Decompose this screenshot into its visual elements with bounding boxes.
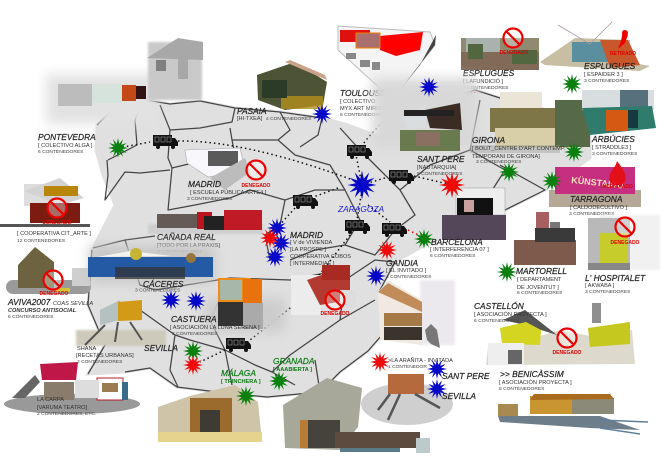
label: Cooperativa: 12 CONTENEDORES [17,238,66,244]
photo: Tarragona: KÜNSTAINO [571,175,624,191]
label: Shana [76,346,134,365]
denied sign: Esplugues: DENEGADO [500,50,529,56]
photo: Pasaia [257,60,327,110]
label: La Arañita: 1 CONTENEDOR [388,364,427,370]
label: Sevilla south: SEVILLA [442,391,476,401]
denied sign: Cooperativa: DENEGADO [43,220,72,226]
photo: Sant Pere haze [372,78,477,148]
label: Benicàssim: [ ASOCIACIÓN PROYECTA ] [499,379,572,386]
denied sign: Aviva2007: DENEGADO [40,291,69,297]
photo: Cañada Real warehouse [148,210,263,234]
label: Shana: SHANA [77,346,97,352]
label: Granada [273,356,315,373]
photo: Castuera [205,278,285,332]
label: La Carpa: LA CARPA [37,397,64,403]
label: Aviva2007 [7,297,93,320]
label: Málaga: MÁLAGA [221,368,256,378]
label: La Arañita: >LA ARAÑITA - INVITADA [388,357,453,364]
label: Pasaia: PASAIA [237,106,267,116]
label: Esplugues Espaider: ESPLUGUES [584,61,636,71]
label: Castellón [474,301,547,324]
green stars [108,74,584,406]
photo: Benicàssim [498,394,648,434]
photo: Gandia [378,280,455,348]
label: Madrid Cooperativa: [LA PROSPE ] [290,247,327,253]
denied sign: Castellón [553,328,582,356]
map of Spain [88,90,590,397]
label: Gandia: [ EL INVITADO ] [386,268,427,274]
label: Cáceres: CÁCERES [143,279,184,289]
photo: Esplugues Lafundició [461,38,539,70]
photo: Pontevedra [46,38,203,124]
label: Aviva2007: AVIVA2007 [7,297,51,307]
label: Barcelona: 6 CONTENEDORES [430,253,476,259]
label: Tarragona [569,194,628,217]
label: Pontevedra: [ COLECTIVO ALGA ] [38,143,93,149]
label: L'Hospitalet: L' HOSPITALET [585,273,646,283]
label: Girona: 3 CONTENEDORES [476,159,522,165]
flame icon: INCENDIADO [601,184,633,190]
label: Toulouse [340,88,386,118]
label: Málaga [221,368,261,385]
photo: Barcelona [442,188,506,240]
photo: Granada building and crowd [283,378,430,453]
label: Cáceres [135,279,184,294]
label: Esplugues Espaider: [ ESPAIDER 3 ] [584,72,623,78]
label: Aviva2007: CONCURSO ANTISOCIAL [8,308,77,314]
label: Esplugues Lafundició: ESPLUGUES [463,68,515,78]
trucks [153,135,414,352]
label: Cooperativa: [ COOPERATIVA CIT_ARTE ] [17,231,91,237]
label: Tarragona: TARRAGONA [570,194,623,204]
label: Arbúcies: 3 CONTENEDORES [592,151,638,157]
photo: Cooperativa Cit_Arte [0,178,90,227]
label: Barcelona [430,237,489,259]
photo: Toulouse [338,26,436,93]
flame icon [601,161,633,190]
denied sign: Aviva2007 [40,270,69,297]
label: Málaga: [ TRINCHERA ] [221,379,261,385]
label: Zaragoza: ZARAGOZA [337,204,384,214]
province borders [88,90,545,397]
photo: La Carpa [4,362,140,414]
label: Gandia: 4 CONTENEDORES [386,274,432,280]
label: Castellón: 6 CONTENEDORES [474,318,520,324]
label: Toulouse: [ COLECTIVO [340,99,376,105]
label: Girona: GIRONA [472,135,505,145]
label: Madrid Escuela: [ ESCUELA PÚBLICA ARTE4 ] [190,189,267,196]
photo: Martorell [514,212,576,265]
route lines [118,87,480,362]
label: Cañada Real [157,232,220,255]
label: Shana: 2 CONTENEDORES [77,359,123,365]
label: Benicàssim: >> BENICÀSSIM [500,369,564,379]
label: Tarragona: 3 CONTENEDORES [569,211,615,217]
label: Esplugues Lafundició: [ LAFUNDICIÓ ] [463,78,504,85]
photo: La Arañita pod [361,374,453,425]
label: Sant Pere: [NAUTARQUIA] [417,165,457,171]
label: Pontevedra: 6 CONTENEDORES [38,149,84,155]
denied sign: Castellón: DENEGADO [553,350,582,356]
denied sign: Madrid Cooperativa: DENEGADO [321,311,350,317]
label: Barcelona: [ INTERFERENCIA 07 ] [430,247,489,253]
label: Martorell: 6 CONTENEDORES [517,290,563,296]
label: Arbúcies: [ STRADDLE3 ] [592,145,632,151]
photo: Sant Pere [400,103,462,151]
label: Aviva2007: COAS SEVILLA [53,301,93,307]
photo: Castellón [486,303,635,365]
denied sign: L'Hospitalet: DENEGADO [611,240,640,246]
label: Sevilla west: SEVILLA [144,343,178,353]
photo: Girona [470,92,590,153]
label: Madrid Escuela: 3 CONTENEDORES [187,196,233,202]
label: Esplugues Lafundició: 3 CONTENEDORES [463,85,509,91]
label: L'Hospitalet [585,273,646,295]
label: La Carpa [37,397,96,417]
label: Castuera: 3 CONTENEDORES [172,331,218,337]
label: Esplugues Espaider [584,61,636,84]
label: Sant Pere: 5 CONTENEDORES [417,171,463,177]
label: Martorell: MARTORELL [516,266,567,276]
label: Toulouse: MYX ART MIRIS ] [340,106,385,112]
label: Cooperativa [17,231,91,244]
label: Pasaia [237,106,312,122]
label: Martorell [516,266,567,296]
label: Esplugues Lafundició [463,68,515,91]
photo: Esplugues Espaider: RETIRADO [610,51,636,57]
label: Madrid Escuela: MADRID [188,179,221,189]
photo: Málaga straw house [158,385,262,442]
photo: Esplugues Espaider [540,22,650,71]
label: La Carpa: 2 CONTENEDORES, ETC. [37,411,96,417]
label: Girona: [ BOLIT_CENTRE D'ART CONTEMP. [472,146,566,152]
label: Cañada Real: [TODO POR LA PRAXIS] [157,243,220,249]
denied sign: L'Hospitalet [611,218,640,246]
label: Toulouse: TOULOUSE [340,88,386,98]
label: Madrid Cooperativa: [ V de VIVIENDA [290,240,333,246]
label: Castuera [170,314,260,337]
label: Granada: GRANADA [273,356,315,366]
label: Sant Pere south: SANT PERE [442,371,490,381]
photo: Shana pod [76,300,166,346]
label: Pasaia: 4 CONTENEDORES [266,116,312,122]
label: Castuera: CASTUERA [171,314,217,324]
photo: Arbúcies [582,90,656,135]
label: La Carpa: [VARUMA TEATRO] [37,405,87,411]
photo: Madrid Cooperativa [291,265,356,315]
photo: L'Hospitalet [588,215,660,270]
label: Castellón: [ ASOCIACIÓN PROYECTA ] [474,311,547,318]
label: Pasaia: [HI-TXEA] [237,116,263,122]
blue stars [161,77,447,399]
label: Granada: [ AAABIERTA ] [273,367,312,373]
label: Girona [472,135,566,165]
denied sign: Esplugues [500,28,529,56]
label: Sant Pere [417,154,465,177]
photo: Cáceres group [88,245,215,283]
label: Esplugues Espaider: 3 CONTENEDORES [584,78,630,84]
label: Cañada Real: 2 CONTENEDORES [157,249,203,255]
label: Arbúcies [591,134,638,157]
label: Tarragona: [ CALDODECULTIVO ] [570,205,628,211]
Zaragoza hub star [348,170,376,200]
denied sign: Madrid Cooperativa [321,290,350,317]
label: Castellón: CASTELLÓN [474,301,525,311]
label: Cañada Real: CAÑADA REAL [157,232,216,242]
label: Gandia: GANDIA [386,258,419,268]
label: Benicàssim [499,369,572,392]
label: L'Hospitalet: 3 CONTENEDORES [585,289,631,295]
label: L'Hospitalet: [ AKWABA ] [585,283,615,289]
label: Barcelona: BARCELONA [431,237,483,247]
label: Girona: TEMPORANI DE GIRONA] [472,154,540,160]
label: Madrid Cooperativa: [ INTERMEDIAE ] [290,261,335,267]
label: Benicàssim: 6 CONTENEDORES [499,386,545,392]
label: Sant Pere: SANT PERE [417,154,465,164]
label: Castuera: [ ASOCIACIÓN LA LUNA SERENA ] [170,324,260,331]
label: Martorell: DE JOVENTUT ] [517,285,559,291]
label: Gandia [386,258,432,280]
label: Madrid Cooperativa [290,230,351,267]
label: Arbúcies: ARBÚCIES [591,134,635,144]
label: Toulouse: 6 CONTENEDORES [340,112,386,118]
denied sign: Madrid Escuela [242,160,271,189]
label: Shana: [RECETAS URBANAS] [76,353,134,359]
photo: Aviva2007 [6,247,91,294]
label: Madrid Cooperativa: MADRID [290,230,323,240]
label: La Arañita [388,357,453,370]
red stars [183,172,465,375]
label: Madrid Cooperativa: COOPERATIVA COBOS [290,254,351,260]
photo: Madrid Escuela [185,148,250,190]
label: Pontevedra: PONTEVEDRA [38,132,96,142]
label: Madrid Escuela [187,179,267,202]
photo: Tarragona [549,167,641,207]
denied sign: Madrid Escuela: DENEGADO [242,183,271,189]
denied sign: Cooperativa [43,198,72,226]
label: Martorell: [ DEPARTAMENT [517,277,562,283]
label: Pontevedra [38,132,96,155]
label: Cáceres: 3 CONTENEDORES [135,288,181,294]
label: Aviva2007: 6 CONTENEDORES [8,314,54,320]
